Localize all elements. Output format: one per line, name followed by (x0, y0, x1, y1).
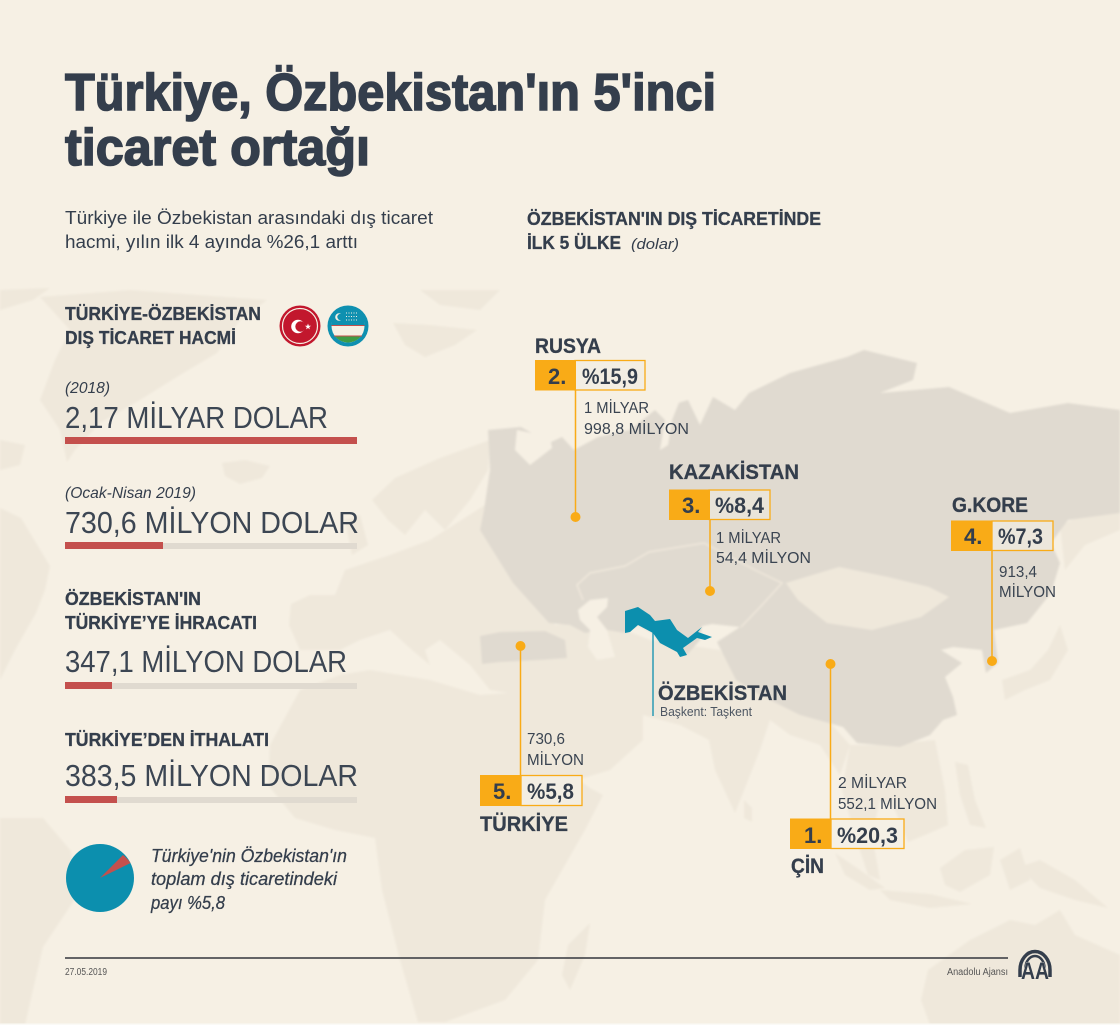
callout: South Korea: %7,3 (998, 524, 1043, 549)
stat: January-April 2019 volume (65, 485, 359, 549)
callout: China: 552,1 MİLYON (838, 794, 937, 813)
icon: Anadolu Agency logo (1020, 952, 1050, 985)
Uzbekistan highlight: Başkent: Taşkent (660, 704, 752, 719)
footer: Anadolu Ajansı (947, 967, 1008, 978)
callout: China (790, 659, 937, 878)
map heading: İLK 5 ÜLKE (527, 233, 621, 253)
icon: Turkish flag (280, 306, 320, 346)
stat: imports from Turkey: TÜRKİYE’DEN İTHALATI (65, 730, 269, 750)
subtitle: hacmi, yılın ilk 4 ayında %26,1 arttı (65, 232, 358, 252)
callout: China: %20,3 (837, 823, 898, 848)
stat: January-April 2019 volume: 730,6 MİLYON DOLAR (65, 505, 359, 540)
callout: Kazakhstan (669, 461, 811, 596)
callout: Kazakhstan: 1 MİLYAR (716, 528, 781, 547)
callout: South Korea: G.KORE (952, 494, 1028, 517)
callout: Turkey: 730,6 (527, 731, 565, 748)
callout: China: 1. (804, 823, 822, 848)
callout: Turkey (480, 641, 584, 836)
stat: imports from Turkey (65, 730, 358, 803)
pie chart: Turkey share (66, 844, 134, 912)
callout: Kazakhstan: 54,4 MİLYON (716, 548, 811, 567)
map heading: ÖZBEKİSTAN'IN DIŞ TİCARETİNDE (527, 209, 821, 229)
callout: Turkey: %5,8 (527, 779, 574, 804)
map heading (527, 209, 821, 253)
stat: Uzbek exports to Turkey: TÜRKİYE’YE İHRACATI (65, 613, 257, 633)
callout: China: 2 MİLYAR (838, 773, 907, 792)
trade volume heading: TÜRKİYE-ÖZBEKİSTAN (65, 304, 261, 324)
trade volume heading: DIŞ TİCARET HACMİ (65, 328, 236, 348)
callout: South Korea: 913,4 (999, 564, 1037, 581)
stat: Uzbek exports to Turkey (65, 589, 357, 689)
stat: 2018 volume: 2,17 MİLYAR DOLAR (65, 400, 328, 435)
callout: Kazakhstan: %8,4 (715, 493, 765, 518)
callout: Russia: %15,9 (582, 364, 638, 389)
callout: Turkey: 5. (493, 779, 511, 804)
trade volume heading (65, 304, 261, 348)
stat: Uzbek exports to Turkey: ÖZBEKİSTAN'IN (65, 589, 201, 609)
stat: 2018 volume (65, 380, 357, 444)
subtitle (65, 208, 433, 252)
stat: Uzbek exports to Turkey: 347,1 MİLYON DOLAR (65, 644, 347, 679)
callout: Russia: RUSYA (535, 335, 601, 358)
footer: 27.05.2019 (65, 967, 107, 978)
callout: Russia: 1 MİLYAR (584, 398, 649, 417)
callout: Russia: 998,8 MİLYON (584, 419, 689, 438)
Uzbekistan highlight (625, 607, 787, 719)
footer (65, 958, 1008, 978)
Uzbekistan highlight: ÖZBEKİSTAN (658, 682, 787, 705)
callout: Kazakhstan: KAZAKİSTAN (669, 461, 799, 484)
stat: imports from Turkey: 383,5 MİLYON DOLAR (65, 758, 358, 793)
callout: Russia (535, 335, 689, 522)
map heading: (dolar) (631, 236, 679, 253)
stat: 2018 volume: (2018) (65, 380, 110, 397)
callout: Kazakhstan: 3. (682, 493, 700, 518)
callout: China: ÇİN (791, 855, 824, 878)
subtitle: Türkiye ile Özbekistan arasındaki dış ticaret (65, 208, 433, 228)
icon: Uzbek flag (328, 306, 368, 346)
callout: Turkey: TÜRKİYE (480, 813, 568, 836)
pie caption: toplam dış ticaretindeki (151, 869, 338, 889)
pie caption (150, 846, 347, 913)
title (65, 64, 716, 177)
world map background (0, 288, 1120, 1025)
pie caption: Türkiye'nin Özbekistan'ın (151, 846, 347, 866)
stat: January-April 2019 volume: (Ocak-Nisan 2019) (65, 485, 196, 502)
title: ticaret ortağı (65, 119, 370, 177)
callout: Russia: 2. (548, 364, 566, 389)
callout: South Korea: MİLYON (999, 582, 1056, 601)
callout: South Korea: 4. (964, 524, 982, 549)
title: Türkiye, Özbekistan'ın 5'inci (65, 64, 716, 122)
callout: South Korea (951, 494, 1056, 666)
pie caption: payı %5,8 (150, 893, 225, 913)
icon: Anadolu Agency logo: AA (1021, 958, 1049, 985)
callout: Turkey: MİLYON (527, 750, 584, 769)
